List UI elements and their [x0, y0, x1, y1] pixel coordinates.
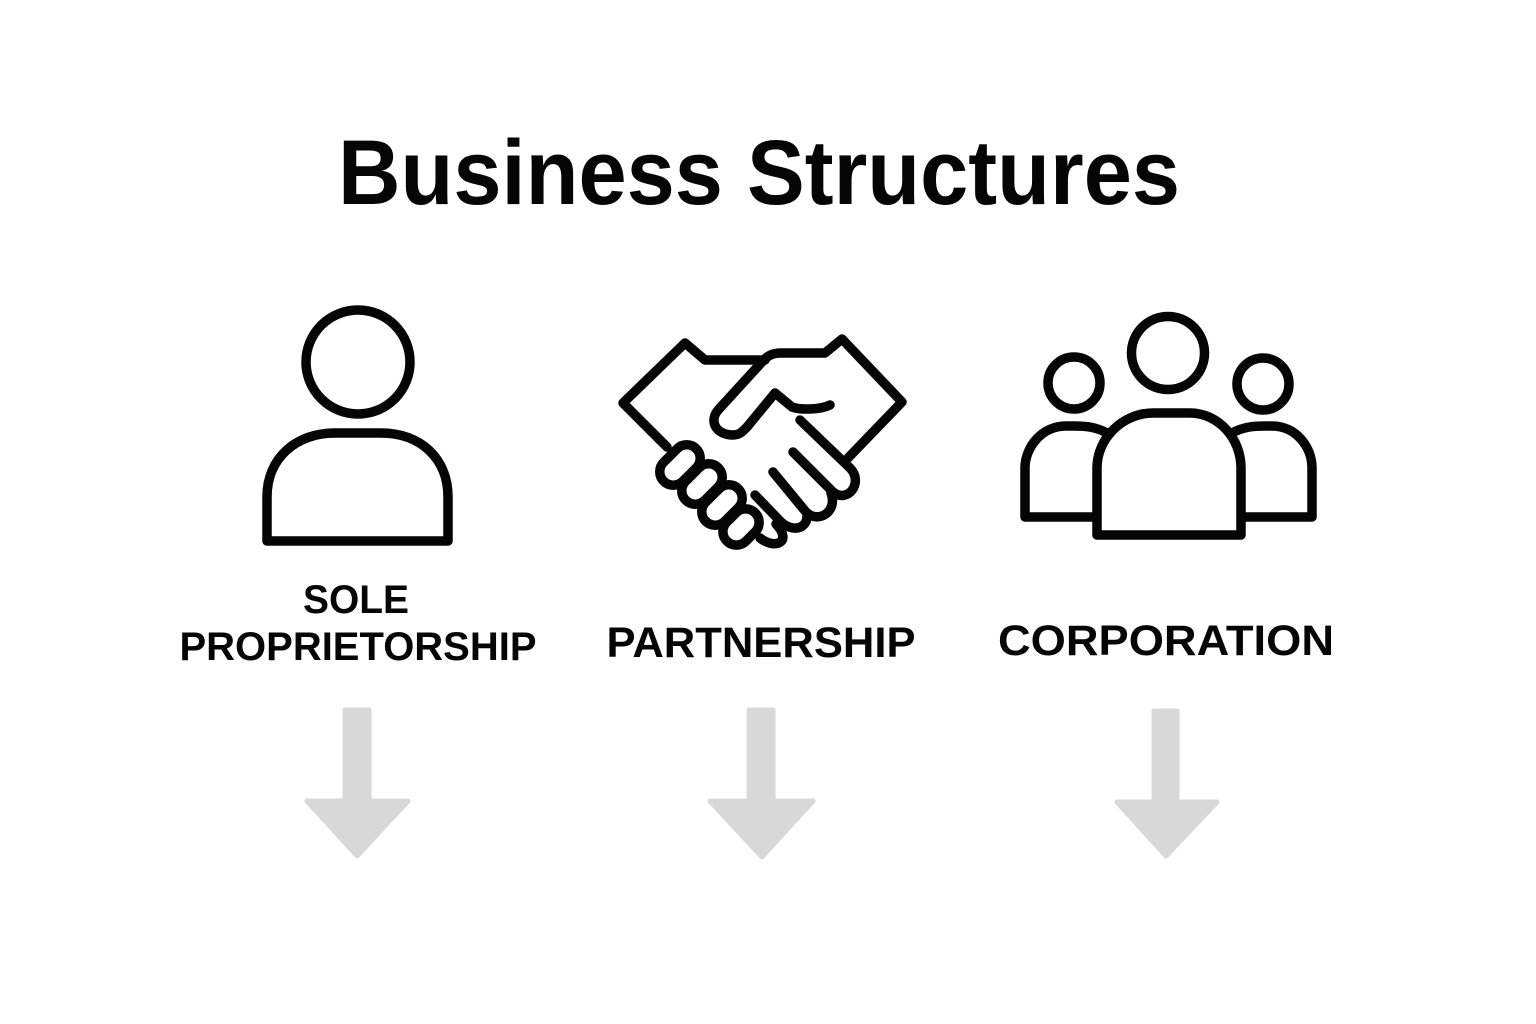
arrow: corporation — [1117, 711, 1217, 856]
label: sole proprietorship: SOLE — [303, 578, 409, 622]
icon: handshake — [623, 339, 902, 551]
label: partnership: PARTNERSHIP — [606, 619, 916, 667]
label: corporation: CORPORATION — [998, 617, 1334, 665]
arrow: sole proprietorship — [307, 710, 408, 856]
icon: group of people — [1025, 316, 1312, 535]
title: Business Structures — [338, 122, 1180, 224]
label: sole proprietorship: PROPRIETORSHIP — [180, 625, 536, 669]
label: sole proprietorship — [180, 578, 536, 669]
icon: single person — [267, 310, 448, 541]
arrow: partnership — [710, 710, 813, 857]
